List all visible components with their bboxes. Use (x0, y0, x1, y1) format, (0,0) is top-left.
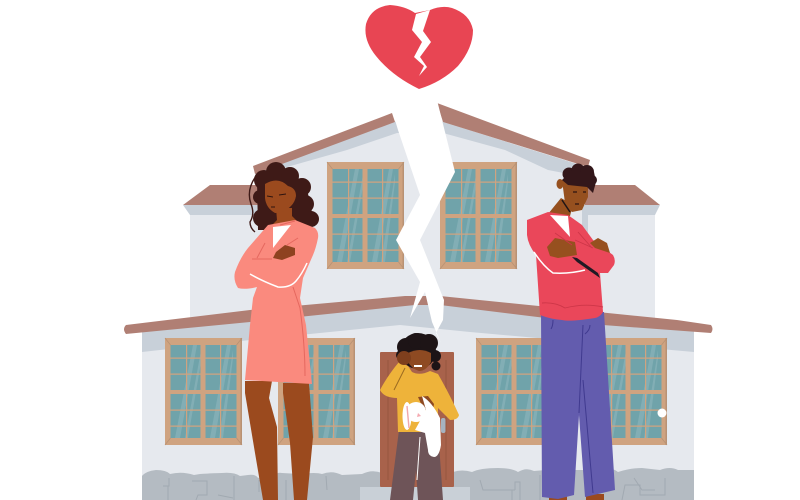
child face (408, 350, 431, 371)
house (124, 103, 712, 500)
woman face (265, 180, 296, 213)
child hand holding rabbit (418, 396, 434, 410)
man feet (549, 494, 604, 500)
lower window 4 (590, 338, 667, 445)
front door (380, 352, 454, 487)
lower roof band (124, 296, 712, 334)
woman white shirt (273, 225, 291, 248)
upper left window (327, 162, 404, 269)
gable roof left slope (253, 113, 395, 174)
toy rabbit (402, 396, 441, 457)
window knob (658, 408, 666, 418)
child (380, 333, 459, 500)
heart crack (412, 10, 431, 76)
woman (234, 162, 319, 500)
lower window 3 (476, 338, 553, 445)
man sweater (527, 212, 615, 321)
gable roof shadow (255, 122, 590, 180)
seam line (417, 437, 420, 480)
woman hand (273, 245, 295, 260)
right wing eave (582, 185, 660, 320)
man trousers (541, 312, 615, 499)
woman legs (245, 381, 313, 500)
gable roof right slope (437, 103, 590, 167)
woman hair strand (249, 176, 256, 232)
upper right window (440, 162, 517, 269)
left wing eave (183, 185, 262, 215)
broken heart (365, 5, 473, 89)
stone foundation (142, 468, 694, 500)
lower walls (142, 310, 694, 500)
woman hair (253, 162, 319, 230)
child sweater (380, 362, 459, 432)
man white shirt (550, 215, 570, 237)
woman neck (272, 208, 298, 240)
man face (562, 180, 588, 212)
child hand at eye (397, 351, 411, 365)
upper walls (190, 112, 655, 330)
man dark shadow (572, 257, 600, 278)
man neck (548, 198, 573, 216)
man ear (556, 179, 564, 189)
man hair (562, 164, 597, 193)
woman dress (234, 220, 318, 384)
man right hand (590, 238, 610, 253)
woman dress folds (252, 221, 305, 376)
lower window 1 (165, 338, 242, 445)
man arm lines (534, 252, 585, 273)
crack through house (392, 100, 455, 343)
man (527, 164, 615, 500)
lower roof shadow (142, 300, 694, 352)
child trousers (390, 430, 443, 500)
child hair (396, 333, 441, 370)
lower window 2 (278, 338, 355, 445)
woman arm line (250, 263, 307, 287)
man left hand (547, 238, 577, 258)
door step (360, 487, 470, 500)
